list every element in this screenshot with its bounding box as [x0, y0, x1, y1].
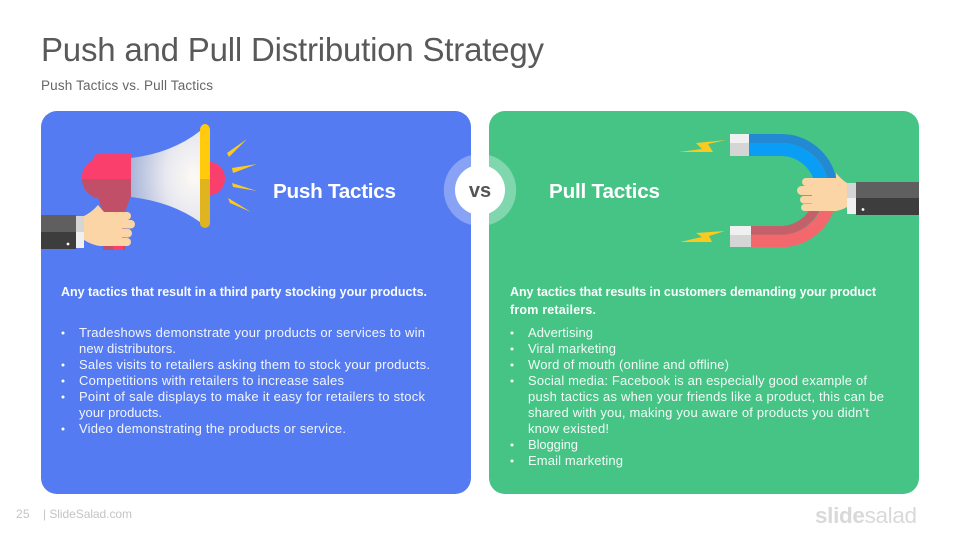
panel: push tactics [41, 111, 471, 494]
hand [84, 205, 135, 246]
list: push tactics: Sales visits to retailers asking them to stock your products. [79, 357, 430, 372]
list: push tactics: Point of sale displays to make it easy for retailers to stock [79, 389, 426, 404]
list: pull tactics: shared with you, making you aware of products you didn't [528, 405, 869, 420]
megaphone back [82, 154, 131, 198]
list: pull tactics: Blogging [528, 437, 578, 452]
cuff [847, 183, 856, 214]
icon: magnet in hand [679, 134, 919, 247]
vs badge: vs [469, 180, 491, 202]
list: push tactics: new distributors. [79, 341, 176, 356]
heading: pull tactics: Pull Tactics [549, 180, 660, 203]
sound rays [227, 139, 257, 212]
list: push tactics: Tradeshows demonstrate your products or services to win [79, 325, 425, 340]
list: pull tactics: know existed! [528, 421, 609, 436]
megaphone front [200, 124, 225, 228]
list: push tactics: your products. [79, 405, 162, 420]
magnet: blue arm [749, 138, 832, 182]
list: pull tactics: Advertising [528, 325, 593, 340]
magnet: red arm [751, 205, 829, 241]
definition: pull: Any tactics that results in customers demanding your product [510, 285, 877, 299]
title: Push and Pull Distribution Strategy [41, 31, 544, 68]
subtitle: Push Tactics vs. Pull Tactics [41, 78, 213, 93]
definition: push: Any tactics that result in a third party stocking your products. [61, 285, 427, 299]
sleeve [41, 215, 76, 249]
list: push tactics [62, 325, 430, 436]
page number: 25 [16, 507, 30, 521]
megaphone cone [131, 131, 200, 222]
list: push tactics: Competitions with retailers to increase sales [79, 373, 344, 388]
megaphone handle [98, 198, 130, 250]
footer source: | SlideSalad.com [43, 507, 132, 521]
sleeve [856, 182, 919, 215]
icon: megaphone in hand [41, 124, 257, 250]
list: pull tactics [510, 325, 884, 468]
list: pull tactics: Viral marketing [528, 341, 616, 356]
hand [797, 173, 847, 211]
logo: slidesalad [815, 503, 917, 528]
list: pull tactics: Word of mouth (online and offline) [528, 357, 729, 372]
list: push tactics: Video demonstrating the products or service. [79, 421, 346, 436]
definition: pull: from retailers. [510, 303, 596, 317]
list: pull tactics: push tactics as when your friends like a product, this can be [528, 389, 884, 404]
panel: pull tactics [489, 111, 919, 494]
cuff [76, 216, 84, 248]
heading: push tactics: Push Tactics [273, 180, 396, 203]
list: pull tactics: Social media: Facebook is an especially good example of [528, 373, 867, 388]
vs badge [444, 155, 516, 225]
magnet caps [730, 134, 751, 247]
definition: pull [510, 285, 877, 317]
lightning bolts [679, 140, 726, 242]
list: pull tactics: Email marketing [528, 453, 623, 468]
